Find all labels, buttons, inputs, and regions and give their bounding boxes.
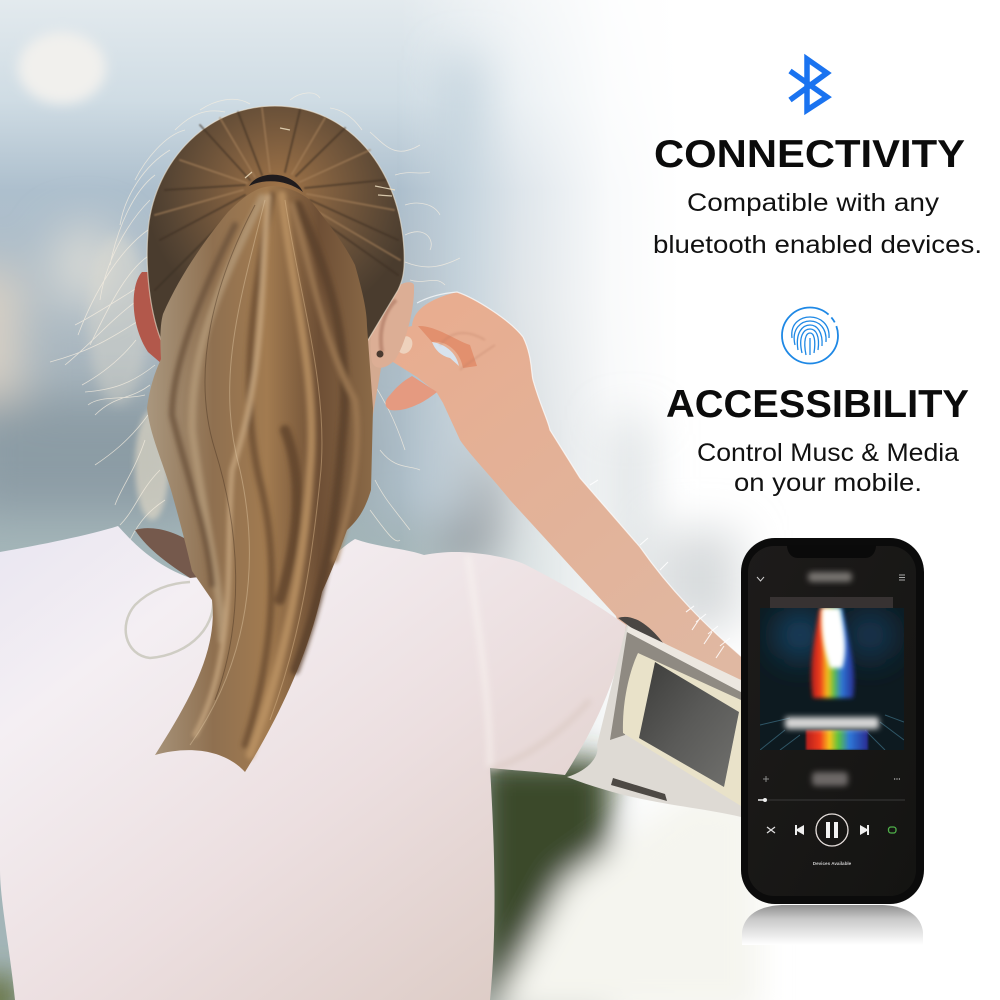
lower finger	[385, 376, 437, 410]
next icon	[860, 825, 869, 835]
text: control line two: on your mobile.	[734, 469, 922, 497]
armband with phone	[567, 617, 741, 817]
thumbnail	[395, 334, 415, 356]
flyaway arm hairs	[590, 480, 730, 658]
previous icon	[795, 825, 804, 835]
earphone cable	[126, 582, 213, 658]
devices available label: Devices Available	[813, 861, 852, 866]
top bar	[770, 597, 893, 608]
runner's arm and hand	[385, 292, 745, 720]
gap between fingers	[432, 342, 459, 366]
blurred song title	[808, 572, 852, 582]
flyaway hair halo	[50, 93, 460, 541]
album art	[760, 608, 904, 750]
blurred artist name	[812, 772, 848, 786]
icon: fingerprint	[782, 308, 838, 364]
plus icon	[763, 776, 769, 782]
more icon	[894, 778, 900, 780]
armband phone screen	[639, 662, 739, 787]
heading: accessibility: ACCESSIBILITY	[666, 383, 969, 426]
text: control line one: Control Musc & Media	[697, 439, 959, 467]
icon: bluetooth	[790, 59, 827, 110]
right ear	[371, 282, 414, 368]
smartphone	[741, 538, 924, 904]
left ear	[134, 272, 165, 364]
hair tie	[249, 175, 303, 192]
head hair	[147, 106, 404, 345]
chevron icon	[757, 577, 764, 581]
text: compatible line one: Compatible with any	[687, 189, 940, 217]
ears	[134, 272, 414, 420]
accessibility section	[666, 308, 969, 497]
text: compatible line two: bluetooth enabled devices.	[653, 231, 982, 259]
progress slider	[758, 798, 905, 802]
shuffle icon	[767, 827, 775, 833]
queue icon	[899, 575, 905, 580]
ponytail	[147, 186, 373, 772]
phone reflection	[742, 905, 923, 945]
armband slot	[611, 778, 667, 801]
connectivity section	[653, 59, 982, 259]
repeat icon	[888, 827, 896, 833]
pause button	[816, 814, 848, 846]
rim light	[417, 292, 742, 657]
armband phone body	[623, 653, 741, 806]
t-shirt	[0, 526, 626, 1000]
curled finger	[418, 326, 477, 368]
neck	[135, 528, 205, 590]
heading: connectivity: CONNECTIVITY	[654, 133, 965, 176]
notch	[787, 545, 876, 558]
